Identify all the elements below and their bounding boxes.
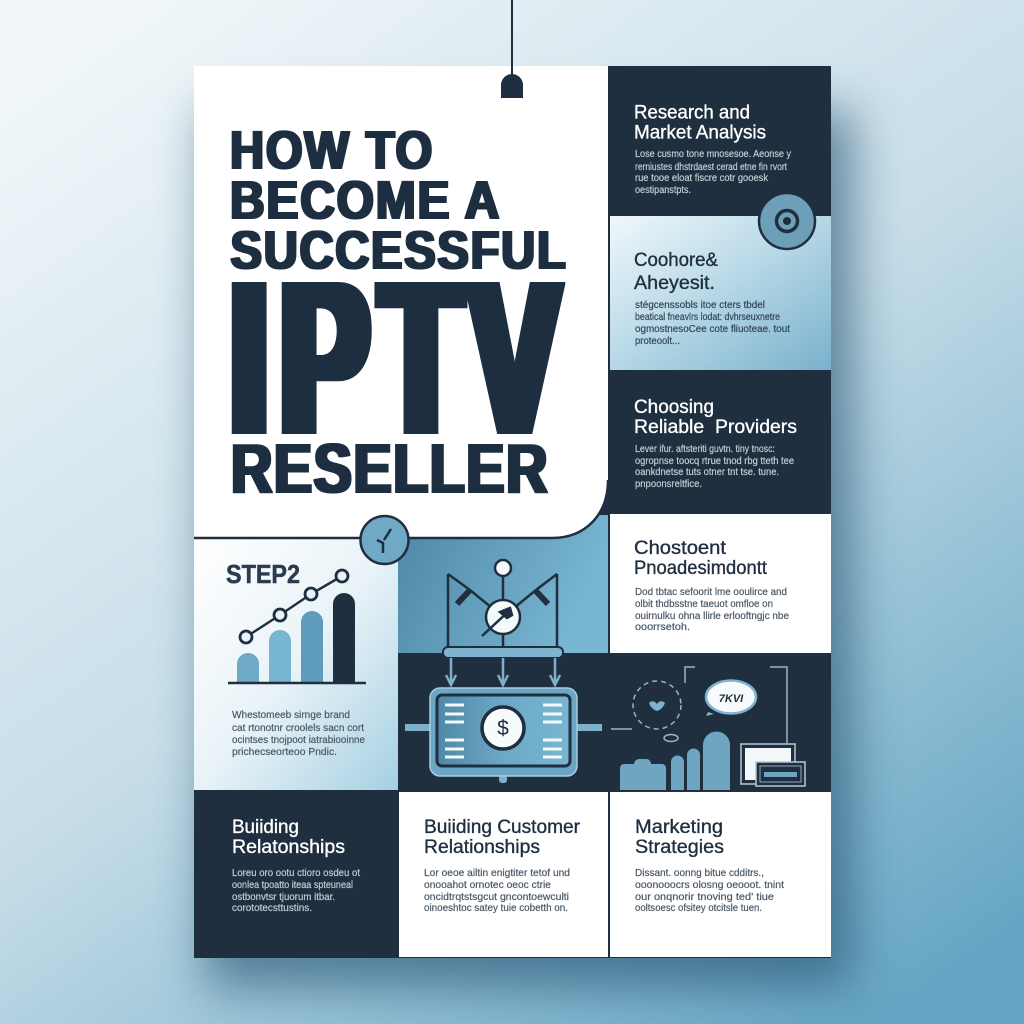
body text: Lever ifur. aftsteriti guvtn. tiny tnosc: — [635, 443, 775, 455]
arrows — [446, 658, 560, 685]
body text — [232, 867, 360, 914]
poster shadow — [205, 110, 853, 988]
body text: Loreu oro ootu ctioro osdeu ot — [232, 867, 360, 879]
support icons — [611, 667, 805, 790]
body text: ogropnse toocq rtrue tnod rbg tteth tee — [635, 455, 794, 467]
panel: research and market analysis — [608, 66, 831, 216]
manifold bar — [443, 647, 563, 658]
body text: olbit thdbsstne taeuot omfloe on — [635, 598, 773, 610]
body text: our onqnorir tnoving ted' tiue — [635, 891, 774, 903]
step body text: prichecseorteoo Pndic. — [232, 746, 337, 758]
body text: ostbonvtsr tjuorum itbar. — [232, 891, 335, 903]
heading — [634, 397, 797, 438]
title text: IPTV — [231, 237, 558, 480]
heading: Buiiding Customer — [424, 817, 581, 838]
heading: Pnoadesimdontt — [634, 558, 768, 579]
panel: dark illustration band — [398, 647, 831, 790]
heading: Market Analysis — [634, 122, 766, 144]
body text: Dissant. oonng bitue cdditrs., — [635, 867, 764, 879]
body text: ouirnulku ohna llirle erlooftngjc nbe — [635, 610, 789, 622]
heading: Research and — [634, 102, 750, 124]
heading: Relationships — [424, 837, 540, 858]
body text — [635, 867, 784, 914]
panel: marketing strategies — [610, 792, 831, 957]
body text: proteoolt... — [635, 335, 680, 347]
step body text: Whestomeeb sirnge brand — [232, 709, 350, 721]
panel: title — [194, 66, 608, 538]
panel: step 2 growth — [194, 538, 398, 790]
body text: Dod tbtac sefoorit lme ooulirce and — [635, 586, 787, 598]
title text — [230, 120, 568, 508]
body text: oonlea tpoatto iteaa spteuneal — [232, 879, 353, 891]
body text — [635, 443, 794, 490]
body text: oankdnetse tuts otner tnt tse. tune. — [635, 466, 779, 478]
heading — [635, 817, 724, 858]
step body text: cat rtonotnr croolels sacn cort — [232, 722, 364, 734]
monitors — [741, 744, 805, 786]
hanging pendant — [501, 0, 523, 98]
body text: pnpoonsreltfice. — [635, 478, 702, 490]
heading — [634, 102, 766, 144]
speech bubble — [706, 680, 756, 716]
heading: Aheyesit. — [634, 273, 715, 294]
body text — [424, 867, 570, 914]
body text: Lose cusmo tone mnosesoe. Aeonse y — [635, 148, 792, 160]
title text: HOW TO — [230, 120, 434, 180]
heading: Reliable Providers — [634, 417, 797, 438]
body text: stégcenssobls itoe cters tbdel — [635, 299, 765, 311]
panel: chostoent pnoadesimdontt — [610, 514, 831, 653]
body text: onooahot ornotec oeoc ctrie — [424, 879, 551, 891]
body text: rue tooe eloat fiscre cotr gooesk — [635, 172, 769, 184]
heading: Relatonships — [232, 837, 345, 858]
body text — [635, 299, 790, 347]
heading: Choosing — [634, 397, 714, 418]
device: $ — [497, 717, 509, 740]
heading: Marketing — [635, 817, 723, 838]
icon: clock badge — [360, 516, 408, 564]
icon: target disc — [759, 193, 815, 249]
speech bubble: 7KVI — [719, 693, 744, 705]
heading: Strategies — [635, 837, 724, 858]
title text: SUCCESSFUL — [230, 220, 568, 280]
hub diagram — [448, 560, 557, 647]
panel: provider network — [398, 515, 608, 653]
body text: ogmostnesoCee cote fliuoteae. tout — [635, 323, 790, 335]
heading: Buiiding — [232, 817, 299, 838]
heading — [232, 817, 345, 858]
heading — [634, 250, 718, 294]
title text: BECOME A — [230, 170, 501, 230]
title text: RESELLER — [231, 430, 549, 508]
heading: Chostoent — [634, 538, 727, 559]
body text — [635, 148, 792, 196]
briefcase and bars — [620, 732, 730, 790]
body text: oncidtrqtstsgcut gncontoewculti — [424, 891, 569, 903]
body text: rerniustes dhstrdaest cerad etne fin rvort — [635, 161, 787, 173]
body text: ooonooocrs olosng oeooot. tnint — [635, 879, 784, 891]
device — [405, 688, 602, 783]
body text: ooorrsetoh. — [635, 621, 690, 633]
step body text — [232, 709, 365, 758]
body text: beatical fneavlrs lodat: dvhrseuxnetre — [635, 311, 780, 323]
bar chart — [228, 570, 366, 683]
body text: oinoeshtoc satey tuie cobetth on. — [424, 902, 568, 914]
heading — [634, 538, 768, 579]
body text: oestipanstpts. — [635, 184, 691, 196]
heading — [424, 817, 581, 858]
poster — [194, 66, 831, 958]
body text — [635, 586, 789, 633]
body text: Lor oeoe ailtin enigtiter tetof und — [424, 867, 570, 879]
panel: cohort analysis — [610, 216, 831, 370]
panel: building customer relationships — [399, 792, 608, 957]
step body text: ocintses tnojpoot iatrabiooinne — [232, 734, 365, 746]
panel: building relationships — [194, 790, 398, 958]
body text: ooltsoesc ofsitey otcitsle tuen. — [635, 902, 762, 914]
panel: choosing reliable providers — [608, 370, 831, 513]
body text: corototecsttustins. — [232, 902, 312, 914]
heading: Coohore& — [634, 250, 718, 271]
step label: STEP2 — [226, 559, 300, 589]
